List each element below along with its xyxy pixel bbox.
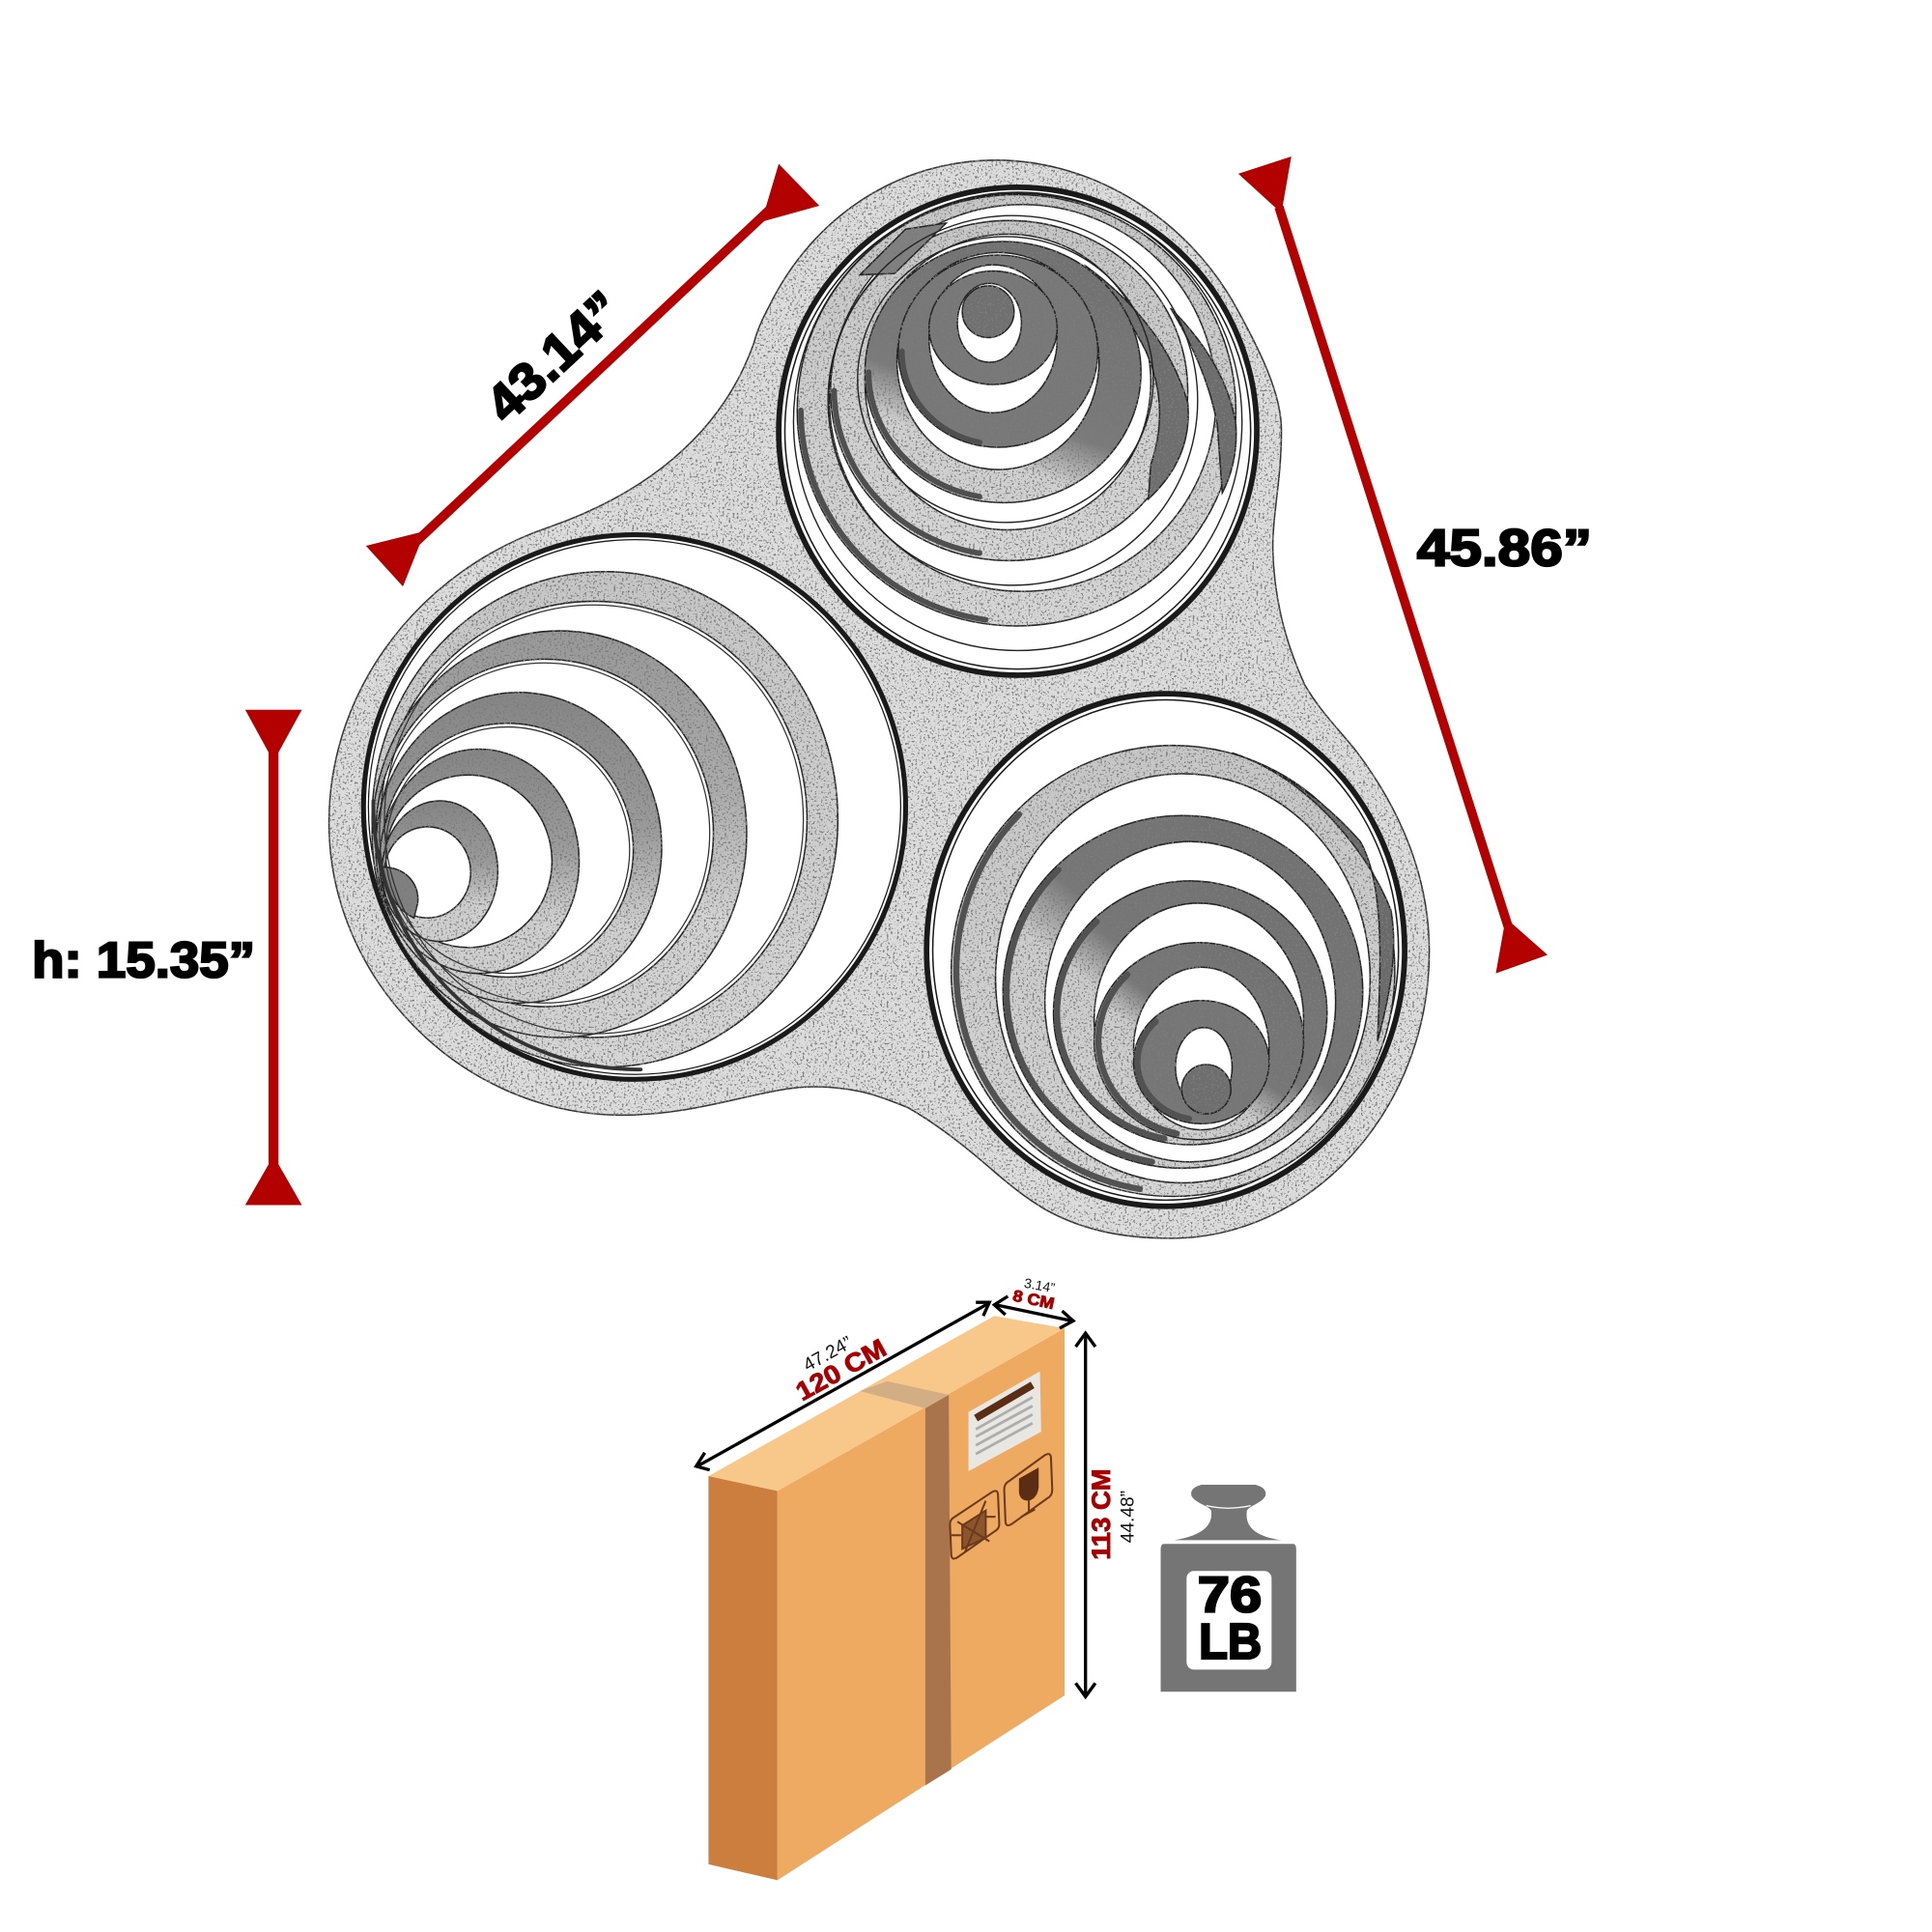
weight knob highlight — [1207, 1506, 1251, 1508]
infographic canvas — [35, 156, 1589, 1880]
shipping box — [708, 1316, 1065, 1880]
box top face — [708, 1316, 1065, 1491]
dark hatching on the top rings — [801, 352, 985, 620]
box left face — [708, 1476, 778, 1880]
hole: left — [363, 535, 906, 1079]
label: 8 CM: 8 CM — [1011, 1287, 1056, 1313]
packing tape — [860, 1381, 952, 1785]
label: 113 CM: 113 CM — [1087, 1468, 1116, 1560]
label: 43.14 inches: 43.14” — [475, 281, 634, 434]
label: 3.14 inches: 3.14” — [1023, 1275, 1057, 1295]
label: 120 CM: 120 CM — [791, 1333, 892, 1406]
top spiral rings — [793, 192, 1242, 650]
weight body — [1161, 1485, 1296, 1691]
arrow: width dimension — [366, 164, 819, 586]
plate body — [329, 160, 1430, 1238]
hole: right — [926, 694, 1405, 1207]
arrow: box length — [696, 1302, 989, 1470]
dark hatching on the right rings — [956, 814, 1189, 1189]
arrow: height dimension — [245, 710, 301, 1205]
hole: top — [779, 187, 1257, 675]
box front face — [778, 1328, 1065, 1880]
arrow: box height — [1076, 1333, 1095, 1696]
arrow: depth dimension — [1238, 156, 1548, 974]
shipping label — [969, 1372, 1041, 1471]
label: 45.86 inches: 45.86” — [1417, 520, 1592, 577]
weight label plate — [1186, 1571, 1271, 1669]
wooden three-lobed wall art — [329, 160, 1430, 1238]
label: 44.48 inches: 44.48” — [1118, 1491, 1138, 1543]
text: LB: LB — [1199, 1614, 1262, 1670]
arrow: box depth — [994, 1296, 1073, 1328]
icon: weight 76 LB — [1161, 1485, 1296, 1691]
icon: do not compress — [950, 1491, 999, 1559]
label: 47.24 inches: 47.24” — [800, 1333, 856, 1376]
left spiral rings — [372, 572, 838, 1069]
label: height 15.35 inches: h: 15.35” — [32, 932, 255, 988]
right spiral rings — [952, 746, 1395, 1197]
icon: fragile glass — [1005, 1454, 1052, 1525]
text: 76: 76 — [1198, 1567, 1262, 1623]
